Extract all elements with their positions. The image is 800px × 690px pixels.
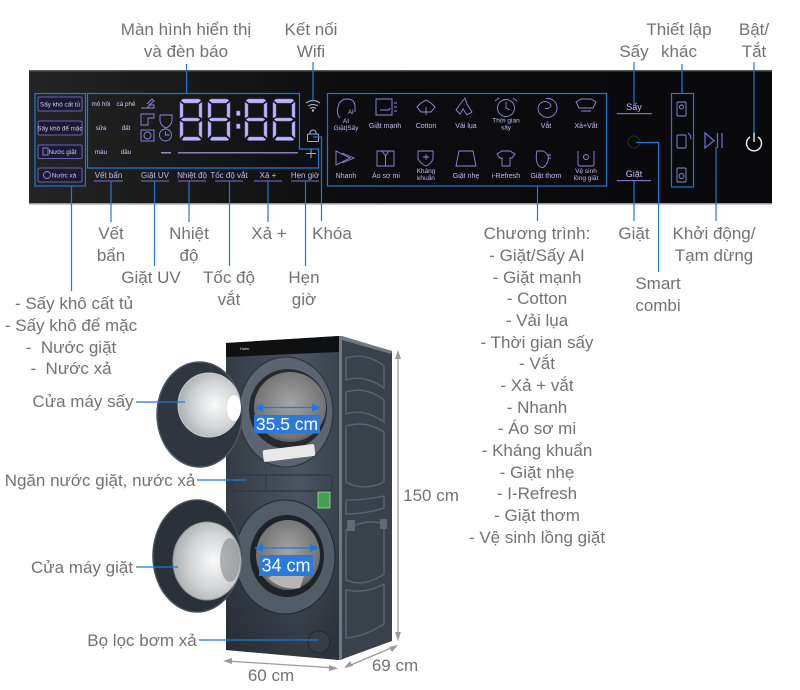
bottom function labels: vắt [218, 290, 241, 309]
washer door diameter [254, 544, 319, 576]
dimension labels: 60 cm [248, 666, 294, 685]
dryer door diameter [254, 404, 321, 434]
function labels: Xả + [260, 171, 277, 180]
dry and wash selector: Giặt [626, 169, 643, 179]
program labels: Kháng [417, 168, 436, 175]
program labels: Giặt mạnh [369, 123, 401, 130]
bottom function labels: giờ [292, 290, 316, 309]
drying and detergent buttons: Sấy khô để mặc [37, 124, 83, 132]
top labels: khác [661, 42, 697, 61]
program list: - Giặt mạnh [493, 268, 581, 287]
drying and detergent list [5, 294, 138, 378]
program list: - I-Refresh [497, 484, 577, 503]
function labels: Vết bẩn [95, 171, 122, 180]
machine part labels: Cửa máy giặt [31, 558, 133, 577]
program list: - Nhanh [507, 398, 567, 417]
function labels: Tốc độ vắt [210, 171, 248, 180]
dryer drum opening [239, 357, 333, 467]
program labels: Giặt thơm [530, 173, 562, 180]
digital display 88:88 [180, 99, 295, 140]
bottom function labels: Tốc độ [203, 268, 255, 287]
dryer door [157, 362, 242, 467]
drying and detergent list: - Sấy khô cất tủ [15, 294, 133, 313]
washer door diameter: 34 cm [261, 556, 311, 576]
display status icons [141, 99, 172, 141]
machine part labels: Ngăn nước giặt, nước xả [5, 471, 196, 490]
bottom function labels: Khóa [312, 224, 352, 243]
function labels: Nhiệt độ [177, 171, 207, 180]
program labels: AI [343, 118, 349, 125]
drying and detergent list: - Nước giặt [26, 338, 117, 357]
machine body: Haier [240, 346, 250, 351]
program labels [334, 118, 598, 182]
bottom function labels: Xả + [251, 224, 287, 243]
top labels: Sấy [619, 42, 649, 61]
progress bar [161, 149, 316, 158]
blue callout lines and frames [35, 62, 754, 291]
program labels: Xả+Vắt [574, 121, 598, 130]
function labels [94, 171, 320, 182]
dry and wash selector: Sấy [626, 102, 642, 112]
machine part labels: Bọ lọc bơm xả [87, 631, 197, 650]
program labels: Áo sơ mi [372, 171, 400, 180]
program labels: i-Refresh [492, 173, 520, 180]
program list: - Giặt nhẹ [500, 463, 574, 482]
program list [469, 224, 605, 547]
bottom function labels: Hẹn [288, 268, 320, 287]
program list: - Cotton [507, 289, 567, 308]
washer dryer tower [153, 336, 392, 660]
bottom function labels: bẩn [97, 246, 125, 265]
power icon [747, 132, 762, 151]
bottom function labels: Vết [98, 224, 124, 243]
drying and detergent buttons: Sấy khô cất tủ [40, 100, 80, 108]
program labels: Nhanh [336, 173, 356, 180]
top labels: Bật/ [739, 20, 769, 39]
machine body [226, 336, 392, 660]
bottom function labels: Smart [635, 274, 681, 293]
dry and wash selector [617, 102, 652, 181]
program list: - Vắt [519, 354, 555, 373]
program labels: Giặt nhẹ [453, 173, 479, 180]
top labels: Wifi [297, 42, 325, 61]
bottom function labels: Tạm dừng [675, 246, 753, 265]
lock icon [308, 130, 318, 142]
program labels: Giặt|Sấy [334, 123, 359, 132]
program labels: lồng giặt [574, 173, 598, 182]
stain type labels [92, 101, 136, 156]
drying and detergent buttons: Nước giặt [49, 149, 77, 156]
stain type labels: máu [95, 149, 108, 156]
stain type labels: đất [122, 123, 131, 132]
bottom function labels: Giặt UV [121, 268, 181, 287]
top labels: Tắt [742, 42, 767, 61]
control panel [29, 70, 772, 204]
drying and detergent buttons [37, 97, 83, 182]
machine part labels [5, 392, 318, 650]
filter cover [308, 631, 330, 653]
program list: - Xả + vắt [500, 376, 574, 395]
top labels: Thiết lập [646, 20, 712, 39]
program labels: Vải lụa [455, 123, 477, 130]
dryer door diameter: 35.5 cm [256, 414, 318, 434]
bottom function labels: độ [180, 246, 198, 265]
wifi icon [306, 100, 320, 111]
washer door [153, 500, 241, 612]
drying and detergent list: - Sấy khô để mặc [5, 316, 138, 335]
washer drum opening [235, 500, 335, 614]
program list: - Giặt/Sấy AI [489, 246, 585, 265]
bottom function labels: Nhiệt [169, 224, 209, 243]
other settings icons [677, 102, 691, 182]
program icons: AI [348, 110, 354, 116]
dimension labels [248, 486, 459, 685]
detergent drawer [232, 475, 332, 491]
program labels: Vắt [541, 121, 551, 130]
bottom function labels: Khởi động/ [673, 224, 756, 243]
program list: Chương trình: [484, 224, 590, 243]
program list: - Vải lụa [506, 311, 569, 330]
bottom function labels [97, 224, 756, 315]
program list: - Vệ sinh lồng giặt [469, 528, 605, 547]
start pause icon [705, 133, 722, 148]
dimension labels: 69 cm [372, 656, 418, 675]
dimension arrows [223, 350, 401, 671]
program list: - Kháng khuẩn [482, 441, 592, 460]
program labels: khuẩn [417, 174, 435, 182]
program icons [336, 98, 596, 168]
machine part labels: Cửa máy sấy [32, 392, 134, 411]
drying and detergent buttons: Nước xả [52, 172, 77, 180]
program labels: Thời gian [492, 118, 520, 124]
function labels: Giặt UV [141, 171, 170, 180]
stain type labels: mô hôi [92, 101, 110, 108]
stain type labels: cà phê [117, 101, 136, 108]
top labels: Kết nối [285, 20, 337, 39]
stain type labels: sữa [96, 125, 107, 132]
program list: - Giặt thơm [494, 506, 580, 525]
program labels: Vệ sinh [575, 168, 597, 175]
program list: - Áo sơ mi [498, 419, 576, 438]
dimension labels: 150 cm [403, 486, 459, 505]
bottom function labels: combi [635, 296, 681, 315]
program list: - Thời gian sấy [481, 333, 594, 352]
program labels: Cotton [416, 123, 436, 130]
drying and detergent list: - Nước xả [30, 359, 112, 378]
function labels: Hẹn giờ [291, 171, 320, 180]
top labels: và đèn báo [144, 42, 228, 61]
top labels [121, 20, 769, 61]
top labels: Màn hình hiển thị [121, 20, 251, 39]
stain type labels: dầu [121, 147, 132, 156]
program labels: sấy [501, 122, 512, 132]
bottom function labels: Giặt [618, 224, 650, 243]
